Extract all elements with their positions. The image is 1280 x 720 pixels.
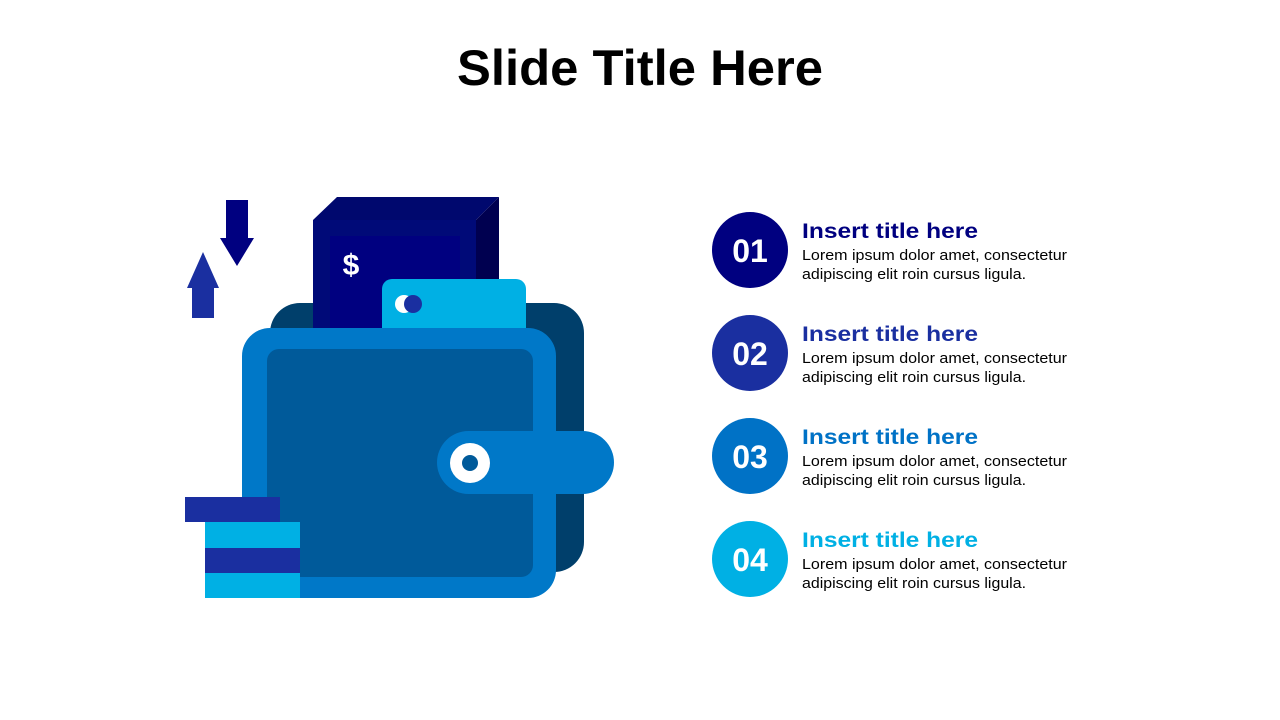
- money box: [313, 197, 499, 330]
- item 02: adipiscing elit roin cursus ligula.: [802, 369, 1026, 386]
- front wallet: [242, 328, 556, 598]
- item 02: 02: [732, 336, 768, 372]
- item 02: [712, 315, 1067, 391]
- item 04: adipiscing elit roin cursus ligula.: [802, 575, 1026, 592]
- item 04: [712, 521, 1067, 597]
- item 02: Lorem ipsum dolor amet, consectetur: [802, 350, 1067, 367]
- item 01: Insert title here: [802, 220, 978, 243]
- money box: $: [343, 249, 360, 282]
- card: [382, 279, 526, 339]
- item 03: [712, 418, 1067, 494]
- clasp: [437, 431, 614, 494]
- item 04: 04: [732, 542, 768, 578]
- title: Slide Title Here: [457, 40, 823, 96]
- icon: arrow up: [187, 252, 219, 318]
- item 01: 01: [732, 233, 768, 269]
- coins: [185, 497, 300, 598]
- item 03: Lorem ipsum dolor amet, consectetur: [802, 453, 1067, 470]
- item 03: Insert title here: [802, 426, 978, 449]
- back wallet: [270, 303, 584, 572]
- item 04: Insert title here: [802, 529, 978, 552]
- item 02: Insert title here: [802, 323, 978, 346]
- item 01: Lorem ipsum dolor amet, consectetur: [802, 247, 1067, 264]
- item 03: adipiscing elit roin cursus ligula.: [802, 472, 1026, 489]
- item 03: 03: [732, 439, 768, 475]
- item 01: adipiscing elit roin cursus ligula.: [802, 266, 1026, 283]
- item 04: Lorem ipsum dolor amet, consectetur: [802, 556, 1067, 573]
- icon: arrow down: [220, 200, 254, 266]
- icon: wallet illustration: [185, 197, 614, 598]
- item 01: [712, 212, 1067, 288]
